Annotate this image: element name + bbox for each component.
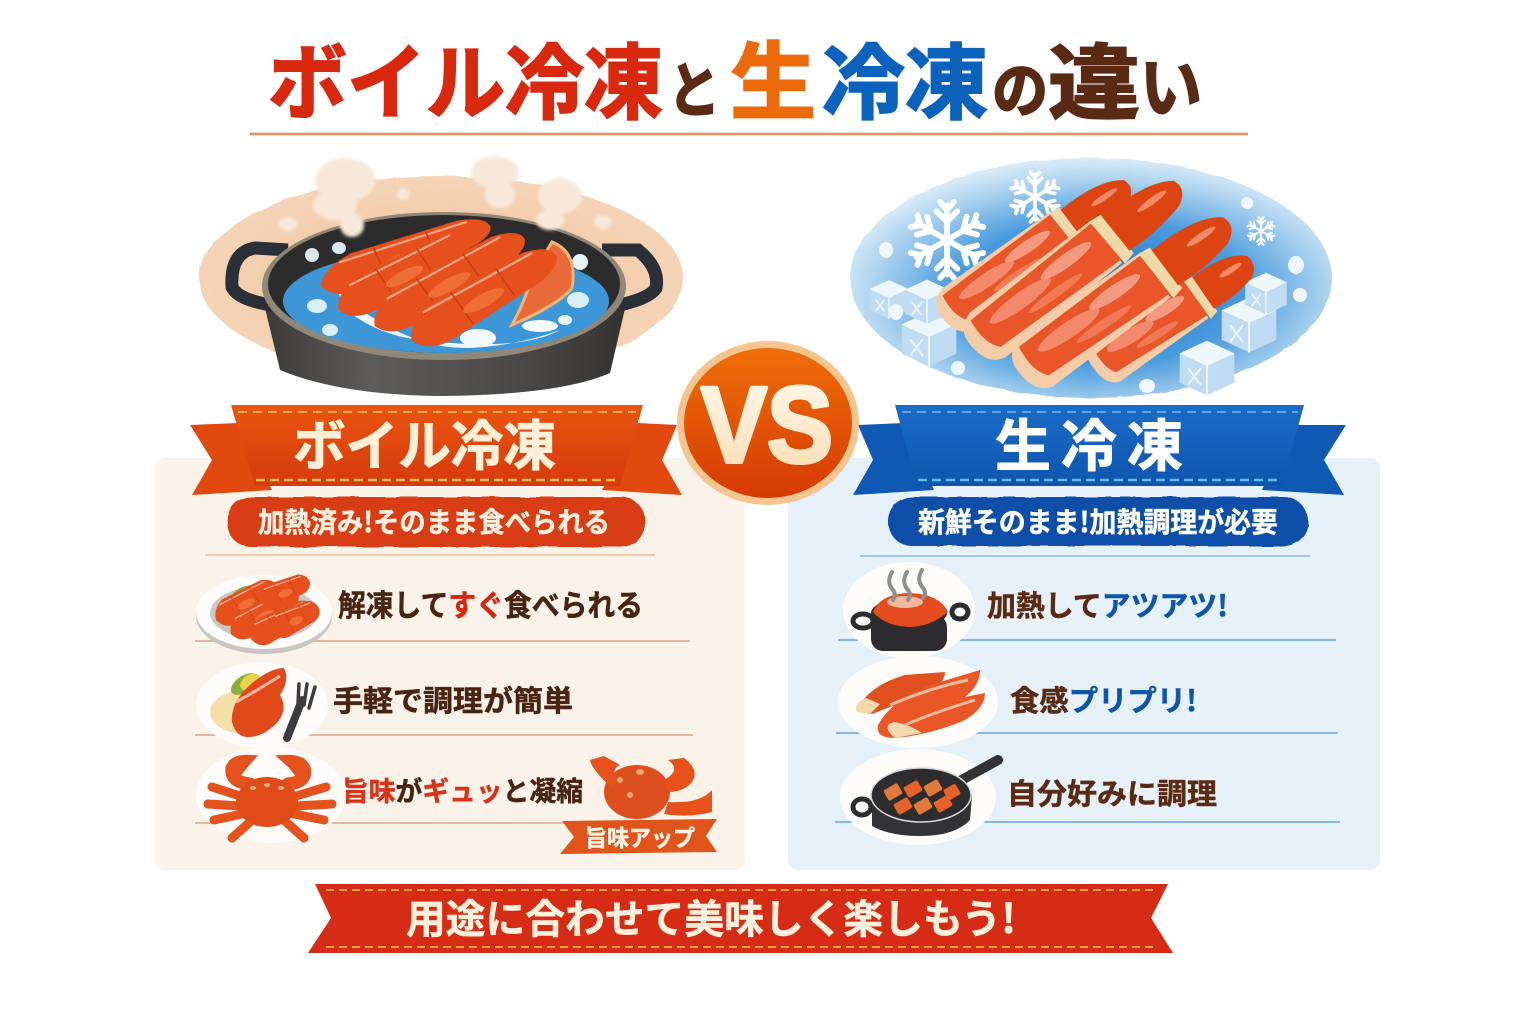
- text: umami concentrated: 旨味がギュッと凝縮: [342, 770, 583, 809]
- title: と: [668, 58, 720, 125]
- title: 冷凍: [822, 39, 988, 130]
- icon: frying pan with crab: [840, 749, 998, 845]
- illustration: boiling pot with crab legs: [199, 156, 683, 396]
- subtitle pill: raw frozen: 新鮮そのまま!加熱調理が必要: [918, 501, 1278, 541]
- ribbon: boiled frozen: [190, 402, 682, 495]
- title: の: [992, 58, 1048, 125]
- ribbon: raw frozen: 生冷凍: [995, 402, 1183, 483]
- text: easy to cook: 手軽で調理が簡単: [333, 678, 573, 720]
- title: 生: [730, 36, 816, 130]
- VS badge: VS: [701, 364, 833, 485]
- text: cook to taste: 自分好みに調理: [1007, 771, 1217, 813]
- text: springy texture: 食感プリプリ!: [1010, 678, 1197, 720]
- text: thaw and eat right away: 解凍してすぐ食べられる: [338, 581, 643, 625]
- icon: hot pot with steam: [843, 562, 975, 658]
- icon: crab with umami badge: [560, 756, 717, 854]
- VS badge: [677, 341, 859, 505]
- panel: boiled frozen background: [155, 458, 745, 870]
- title: 違: [1048, 39, 1140, 130]
- ribbon: raw frozen: [853, 402, 1346, 495]
- illustration: frozen crab legs on ice: [850, 158, 1332, 398]
- icon: crab on plate: [196, 747, 346, 843]
- title: ボイル冷凍: [268, 39, 663, 130]
- title: [268, 36, 1202, 130]
- title: い: [1140, 51, 1202, 127]
- ribbon: boiled frozen: ボイル冷凍: [293, 402, 556, 481]
- icon: crab with umami badge: 旨味アップ: [585, 819, 695, 853]
- icon: plate of crab legs: [196, 570, 332, 654]
- text: piping hot: 加熱してアツアツ!: [987, 583, 1228, 625]
- footer banner: 用途に合わせて美味しく楽しもう!: [406, 887, 1016, 945]
- footer banner: [308, 884, 1173, 953]
- icon: raw crab legs on plate: [838, 656, 998, 748]
- icon: plate with crab and fork: [196, 662, 328, 748]
- panel: raw frozen background: [788, 458, 1380, 870]
- subtitle pill: boiled frozen: 加熱済み!そのまま食べられる: [258, 501, 610, 541]
